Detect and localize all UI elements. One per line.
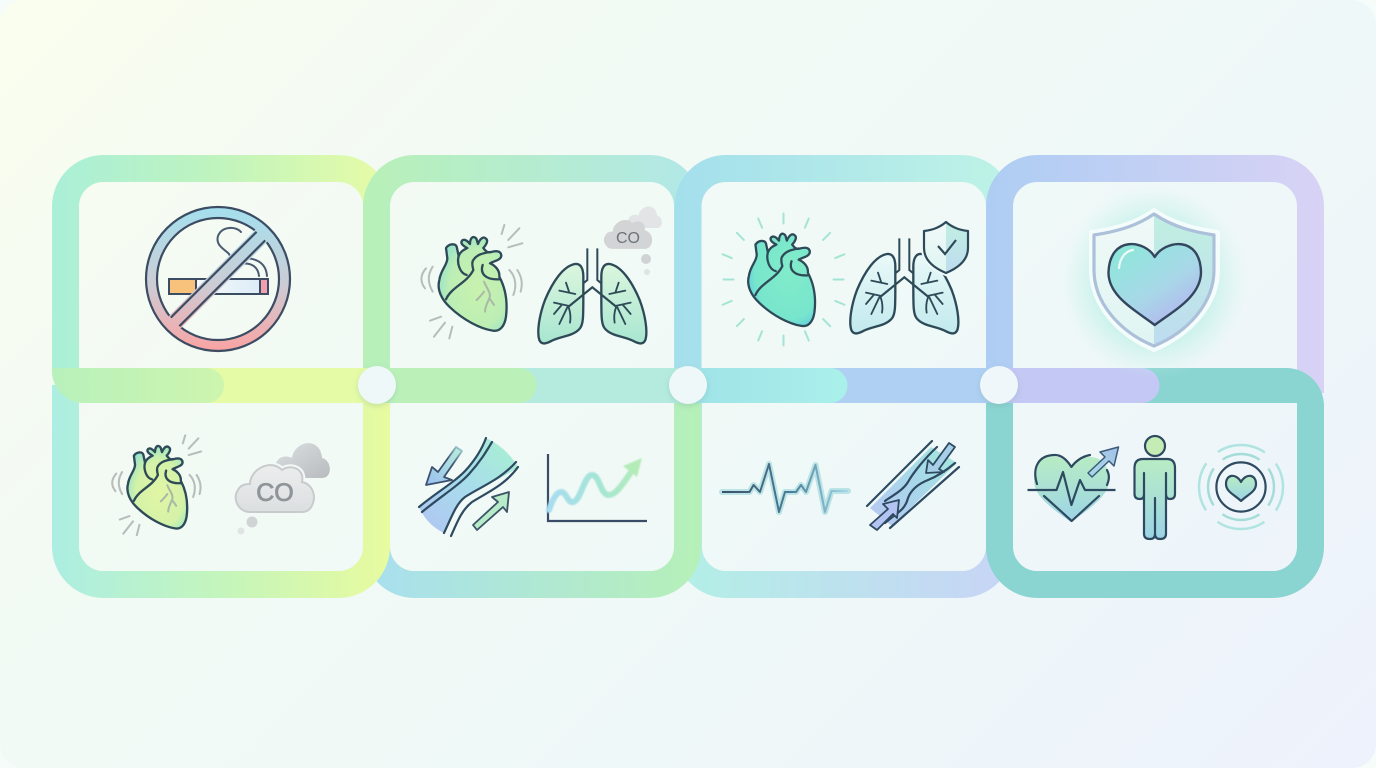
icon: ECG pulse line (722, 464, 848, 512)
frame: top row, step 2 (376, 168, 688, 368)
icon: no smoking sign (146, 207, 290, 351)
band: divider segments step 3 (688, 368, 999, 403)
arrow: heart rate up (1088, 447, 1118, 477)
connector node 2 (669, 366, 707, 404)
icon: irregular heart, bottom step 1 (112, 435, 201, 535)
icon: clean lungs, step 3 (850, 238, 958, 333)
arrow: inward flow (426, 447, 462, 485)
frame: top row, step 3 (688, 168, 1000, 368)
heart on shield (1108, 244, 1201, 325)
frame: bottom row, step 3 (688, 395, 1000, 584)
arrow: outward flow (473, 492, 509, 530)
band: divider segment step 4 (999, 368, 1160, 403)
arrow: top inward flow (926, 443, 955, 473)
band: divider segments step 1 (52, 368, 377, 403)
icon: healthy heart, step 3 (723, 214, 844, 346)
chart: rising line (548, 454, 647, 521)
band: divider segments step 2 (377, 368, 688, 403)
icon: stressed heart, step 2 (421, 225, 522, 338)
connector node 3 (980, 366, 1018, 404)
icon: artery with flow arrows (419, 438, 518, 536)
connector node 1 (358, 366, 396, 404)
smoke (217, 228, 267, 276)
arrow: bottom inward flow (870, 500, 899, 530)
cigarette (169, 279, 268, 294)
icon: open blood vessel with arrows (867, 441, 959, 530)
icon: large CO cloud, bottom step 1 (236, 443, 330, 534)
icon: protected heart with signal rings (1183, 429, 1299, 545)
icon: small shield with check (924, 222, 968, 273)
icon: CO cloud, step 2 (604, 207, 662, 275)
icon: glowing shield with heart (1060, 184, 1248, 380)
frame: bottom row, step 4 (1000, 368, 1324, 584)
icon: CO cloud, step 2: CO (616, 230, 640, 247)
frame: top row, step 4 (1000, 168, 1310, 393)
frame: bottom row, step 1 (66, 385, 376, 584)
icon: healthy person (1134, 436, 1175, 539)
icon: heart with pulse and arrow (1028, 447, 1118, 522)
frame: bottom row, step 2 (376, 395, 688, 584)
icon: lungs, step 2 (538, 248, 646, 343)
heart radiance rays (723, 214, 844, 346)
icon: large CO cloud, bottom step 1: CO (256, 479, 294, 507)
frame: top row, step 1 (66, 168, 376, 368)
